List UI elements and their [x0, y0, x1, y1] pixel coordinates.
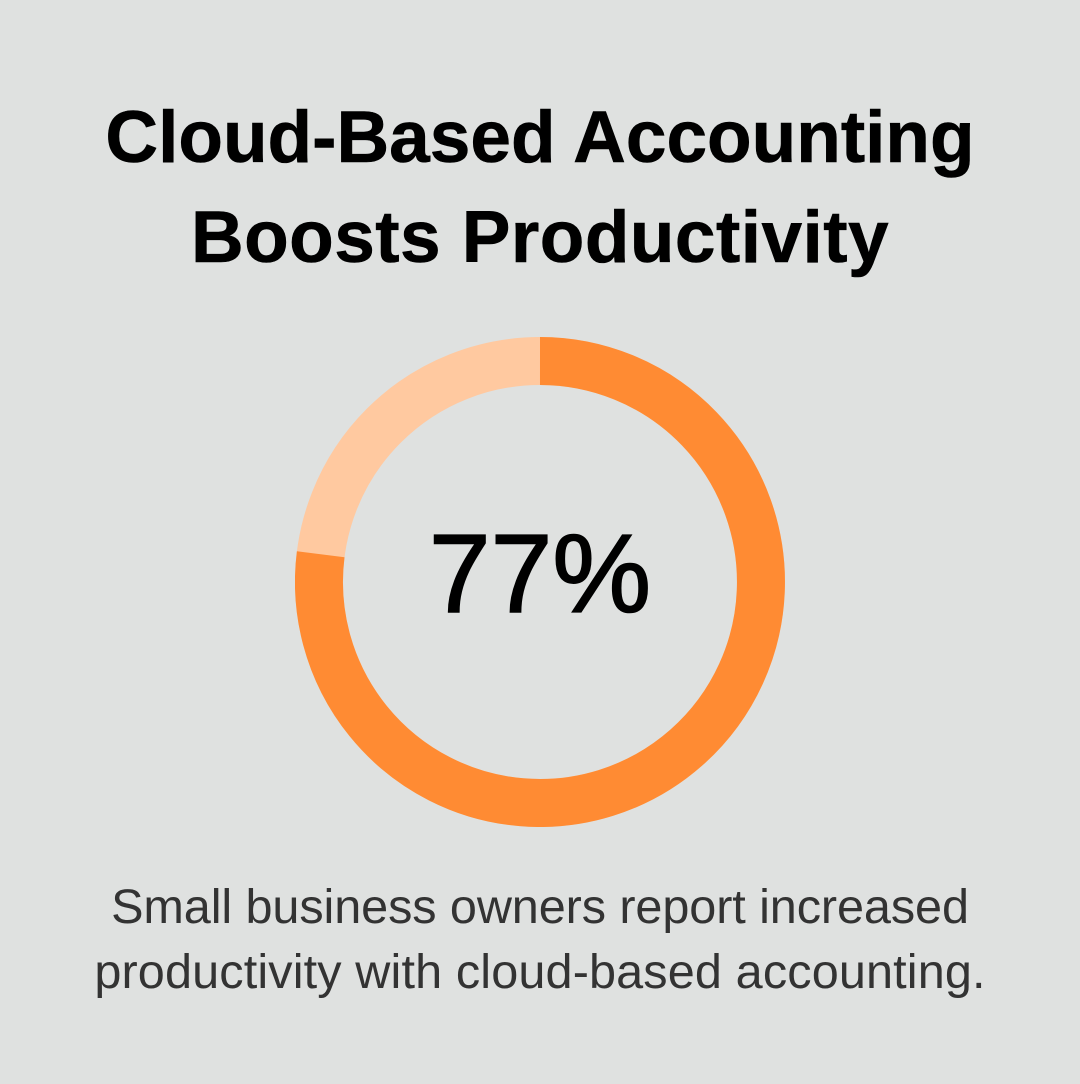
donut value label: 77%: [429, 512, 651, 636]
donut chart: 77%: [295, 337, 785, 827]
donut remainder segment: [319, 361, 761, 803]
title: [105, 97, 975, 278]
description text: [94, 880, 986, 999]
title: Cloud-Based Accounting: [105, 97, 975, 178]
title: Boosts Productivity: [191, 197, 889, 278]
donut value segment: [319, 361, 761, 803]
description text: productivity with cloud-based accounting.: [94, 945, 986, 999]
description text: Small business owners report increased: [111, 880, 969, 934]
